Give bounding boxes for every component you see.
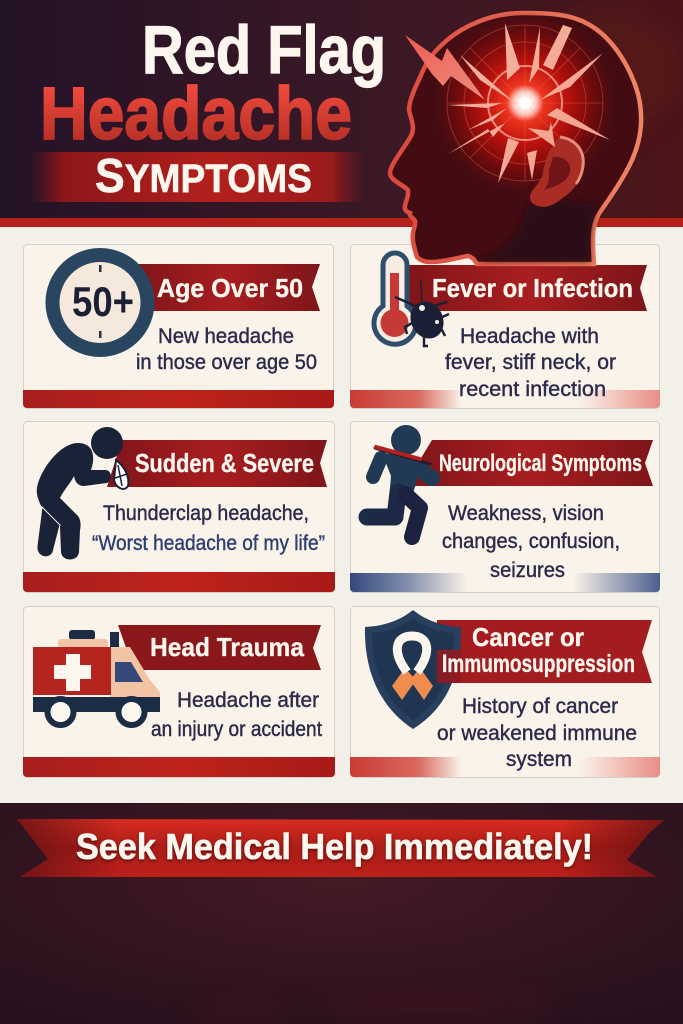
heading: Fever or Infection	[432, 273, 633, 303]
ribbon	[408, 440, 653, 486]
icon: 50+ age badge	[52, 255, 148, 350]
card: Fever or Infection	[350, 244, 660, 408]
description: Headache after	[177, 689, 319, 712]
header red stripe	[0, 218, 683, 227]
icon: ambulance	[33, 630, 160, 725]
icon: thermometer	[374, 253, 416, 344]
call to action banner	[17, 819, 664, 877]
description: Headache with	[460, 325, 599, 348]
header background	[0, 0, 683, 220]
description: or weakened immune	[437, 722, 637, 745]
description: recent infection	[459, 378, 606, 401]
description: Thunderclap headache,	[103, 502, 309, 525]
card footer bar	[23, 572, 335, 592]
icon: germ bug	[395, 279, 450, 346]
inner ear	[544, 157, 570, 190]
ear rim	[560, 137, 583, 184]
card footer bar	[350, 757, 660, 777]
ribbon	[118, 625, 321, 670]
card: Age Over 50	[23, 244, 334, 408]
heading: Head Trauma	[150, 632, 305, 662]
symptoms banner: SYMPTOMS	[95, 150, 312, 203]
icon: bent-over person	[37, 427, 128, 560]
card footer bar	[23, 757, 335, 777]
ribbon overlap on shield	[437, 650, 461, 683]
head illustration with headache burst	[390, 11, 641, 264]
description: fever, stiff neck, or	[445, 351, 616, 374]
neck shadow	[477, 200, 598, 261]
description: seizures	[490, 559, 565, 582]
card: Neurological Symptoms	[350, 422, 660, 592]
call to action banner: Seek Medical Help Immediately!	[76, 826, 593, 867]
description: in those over age 50	[136, 351, 317, 374]
description: “Worst headache of my life”	[92, 532, 325, 555]
lightning bolt	[405, 35, 485, 100]
symptoms banner	[30, 150, 365, 203]
title	[30, 12, 386, 203]
description	[437, 695, 637, 771]
burst spikes	[447, 23, 610, 183]
ribbon	[107, 440, 327, 487]
description	[92, 502, 325, 555]
card: Head Trauma	[23, 606, 335, 778]
heading	[442, 622, 635, 678]
description	[442, 502, 620, 582]
icon: shield with awareness ribbon	[365, 610, 461, 729]
icon: limping person	[367, 425, 432, 537]
card footer bar	[350, 573, 660, 592]
title line: Red Flag: Red Flag	[142, 12, 386, 88]
ribbon back section	[437, 620, 652, 683]
description: system	[506, 748, 572, 771]
card footer bar	[23, 390, 334, 408]
description	[151, 689, 322, 741]
description: Weakness, vision	[448, 502, 604, 525]
description: changes, confusion,	[442, 530, 620, 553]
pain glow and rings	[433, 11, 617, 195]
description: an injury or accident	[151, 718, 322, 741]
head silhouette	[390, 13, 641, 264]
heading: Sudden & Severe	[135, 448, 314, 478]
footer background	[0, 803, 683, 1024]
ribbon	[405, 265, 647, 311]
card footer bar	[350, 390, 660, 408]
title line: Headache: Headache	[40, 72, 352, 155]
icon: 50+ age badge: 50+	[72, 278, 134, 325]
description	[445, 325, 616, 401]
description	[136, 325, 317, 374]
cream content panel	[0, 227, 683, 803]
ear	[530, 136, 584, 207]
footer mottling	[190, 987, 560, 1024]
ribbon	[135, 264, 320, 311]
card: Cancer or Immunosuppression	[350, 606, 660, 778]
header mottling	[540, 10, 680, 130]
heading: Age Over 50	[157, 273, 303, 303]
tissue held to face	[114, 460, 128, 489]
description: History of cancer	[462, 695, 618, 718]
heading: Cancer or	[472, 622, 584, 652]
card: Sudden & Severe	[23, 422, 335, 592]
description: New headache	[158, 325, 294, 348]
